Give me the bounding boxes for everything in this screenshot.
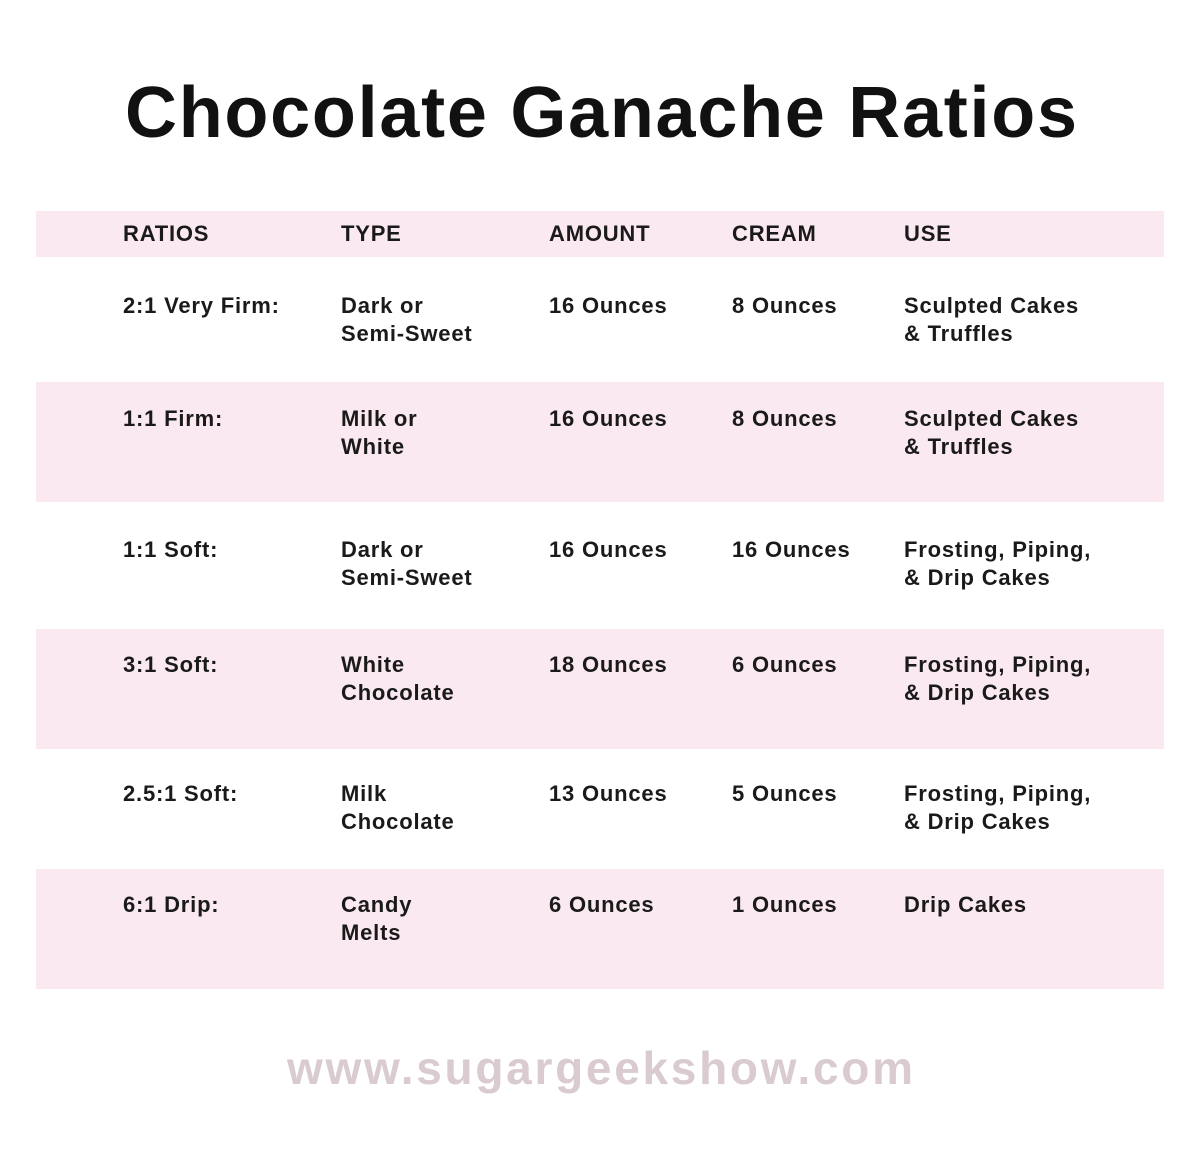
row: 2:1 very firm: Semi-Sweet (341, 321, 472, 346)
header row (36, 211, 1164, 257)
row: 6:1 drip: Candy (341, 892, 412, 917)
row: 1:1 firm (36, 382, 1164, 502)
row: 3:1 soft: 18 Ounces (549, 652, 667, 677)
row: 2:1 very firm: 16 Ounces (549, 293, 667, 318)
row: 6:1 drip: 6 Ounces (549, 892, 654, 917)
row: 2.5:1 soft: & Drip Cakes (904, 809, 1051, 834)
row: 1:1 soft (123, 537, 1091, 590)
row: 2.5:1 soft (123, 781, 1091, 834)
row: 1:1 soft: Semi-Sweet (341, 565, 472, 590)
row: 6:1 drip: Drip Cakes (904, 892, 1027, 917)
row: 1:1 soft: Frosting, Piping, (904, 537, 1091, 562)
row: 1:1 firm: Milk or (341, 406, 418, 431)
header row: USE (904, 221, 952, 246)
header row: AMOUNT (549, 221, 650, 246)
row: 1:1 firm: & Truffles (904, 434, 1013, 459)
row: 1:1 firm: 8 Ounces (732, 406, 837, 431)
table (36, 211, 1164, 989)
row: 3:1 soft: Chocolate (341, 680, 455, 705)
row: 1:1 soft: 1:1 Soft: (123, 537, 218, 562)
row: 1:1 firm: Sculpted Cakes (904, 406, 1079, 431)
row: 2.5:1 soft: 2.5:1 Soft: (123, 781, 238, 806)
row: 1:1 soft: 16 Ounces (549, 537, 667, 562)
row: 3:1 soft: 3:1 Soft: (123, 652, 218, 677)
row: 2:1 very firm: 8 Ounces (732, 293, 837, 318)
row: 2.5:1 soft: Frosting, Piping, (904, 781, 1091, 806)
row: 1:1 soft: Dark or (341, 537, 424, 562)
row: 2.5:1 soft: 13 Ounces (549, 781, 667, 806)
row: 6:1 drip: 1 Ounces (732, 892, 837, 917)
row: 6:1 drip: Melts (341, 920, 401, 945)
row: 2.5:1 soft: 5 Ounces (732, 781, 837, 806)
row: 1:1 soft: 16 Ounces (732, 537, 850, 562)
row: 6:1 drip: 6:1 Drip: (123, 892, 219, 917)
header row: TYPE (341, 221, 402, 246)
row: 2.5:1 soft: Milk (341, 781, 387, 806)
title: Chocolate Ganache Ratios (125, 73, 1077, 153)
row: 3:1 soft: Frosting, Piping, (904, 652, 1091, 677)
row: 3:1 soft: & Drip Cakes (904, 680, 1051, 705)
row: 1:1 firm: 1:1 Firm: (123, 406, 223, 431)
row: 1:1 soft: & Drip Cakes (904, 565, 1051, 590)
row: 2:1 very firm: Dark or (341, 293, 424, 318)
row: 2:1 very firm: 2:1 Very Firm: (123, 293, 280, 318)
row: 6:1 drip (36, 869, 1164, 989)
row: 2:1 very firm (123, 293, 1079, 346)
footer url: www.sugargeekshow.com (286, 1042, 913, 1094)
row: 1:1 firm: White (341, 434, 405, 459)
header row: RATIOS (123, 221, 209, 246)
row: 3:1 soft (36, 629, 1164, 749)
row: 2:1 very firm: Sculpted Cakes (904, 293, 1079, 318)
row: 2.5:1 soft: Chocolate (341, 809, 455, 834)
row: 3:1 soft: White (341, 652, 405, 677)
row: 3:1 soft: 6 Ounces (732, 652, 837, 677)
row: 2:1 very firm: & Truffles (904, 321, 1013, 346)
header row: CREAM (732, 221, 817, 246)
row: 1:1 firm: 16 Ounces (549, 406, 667, 431)
